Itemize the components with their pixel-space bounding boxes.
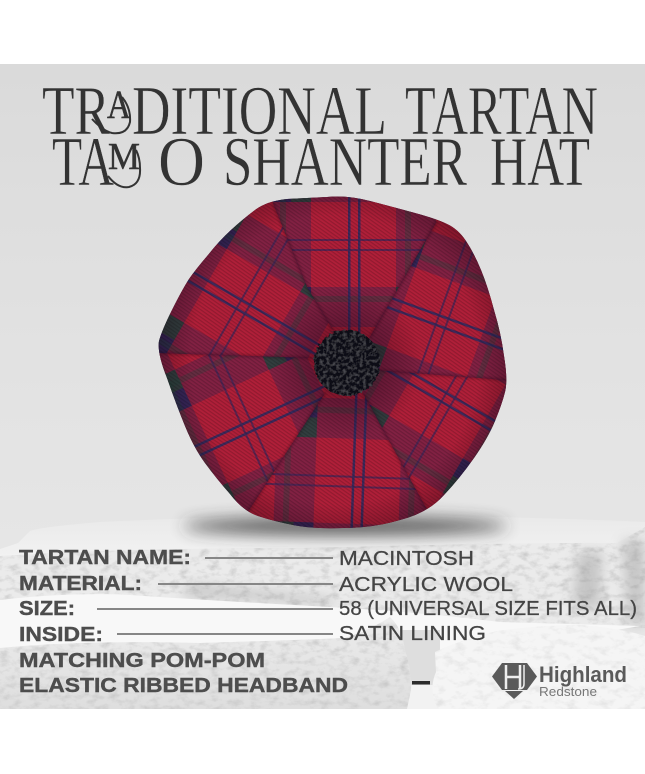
- hat base: [150, 190, 515, 535]
- hat panel: upper right: [369, 220, 506, 380]
- spec: inside: SATIN LINING: [339, 623, 486, 645]
- spec: tartan name: TARTAN NAME:: [19, 547, 191, 569]
- gap mark: [412, 681, 430, 684]
- title line 1: A: [107, 82, 131, 127]
- centre shading: [283, 302, 414, 428]
- logo: Highland Redstone: [492, 662, 627, 699]
- logo wordmark: Highland: [539, 662, 627, 687]
- title line 2: TA: [52, 124, 114, 201]
- hat panel: lower left: [159, 353, 328, 512]
- hat panel: upper left: [158, 202, 334, 358]
- hat shadow: [183, 517, 507, 535]
- pom-pom: [314, 330, 380, 396]
- title line 2: O: [158, 124, 205, 201]
- hat edge shading: [150, 190, 515, 535]
- stone plinth: [0, 515, 645, 709]
- tartan hat: [158, 196, 506, 528]
- title: [42, 73, 598, 201]
- spec: size: [19, 598, 637, 620]
- front right stone: [432, 625, 645, 709]
- spec: matching pom-pom: MATCHING POM-POM: [19, 650, 265, 672]
- hat panel: top: [273, 196, 437, 338]
- logo mark: [492, 663, 537, 699]
- gap between stones: [400, 630, 440, 709]
- spec: material: [19, 573, 513, 596]
- hat panel: lower right: [362, 370, 506, 510]
- title line 2: HAT: [490, 124, 590, 201]
- panel seams: [158, 203, 507, 513]
- title line 2: SHANTER: [223, 124, 467, 201]
- title line 1: DITIONAL: [132, 73, 387, 150]
- spec: tartan name: [19, 547, 474, 570]
- slab side shading: [180, 540, 645, 625]
- spec: material: MATERIAL:: [19, 573, 142, 595]
- stone top surface: [0, 515, 645, 620]
- title line 1: TR: [42, 73, 110, 150]
- spec: material: ACRYLIC WOOL: [339, 574, 513, 596]
- spec: size: 58 (UNIVERSAL SIZE FITS ALL): [339, 598, 637, 620]
- specification list: [19, 547, 637, 697]
- front left stone: [0, 617, 411, 709]
- spec: size: SIZE:: [19, 598, 75, 620]
- fabric weave: [150, 190, 515, 535]
- title line 1: [42, 73, 598, 150]
- title line 2: M: [108, 136, 140, 178]
- white ledge: [0, 594, 640, 650]
- upper slab face: [0, 527, 645, 628]
- hat panel: bottom: [248, 390, 426, 528]
- spec: inside: INSIDE:: [19, 624, 103, 646]
- spec: elastic ribbed headband: ELASTIC RIBBED HEADBAND: [19, 675, 348, 697]
- gap floor: [405, 685, 440, 709]
- title line 2: [52, 124, 590, 201]
- spec: inside: [19, 623, 486, 646]
- spec: tartan name: MACINTOSH: [339, 548, 474, 570]
- logo: Highland Redstone: Redstone: [539, 684, 597, 699]
